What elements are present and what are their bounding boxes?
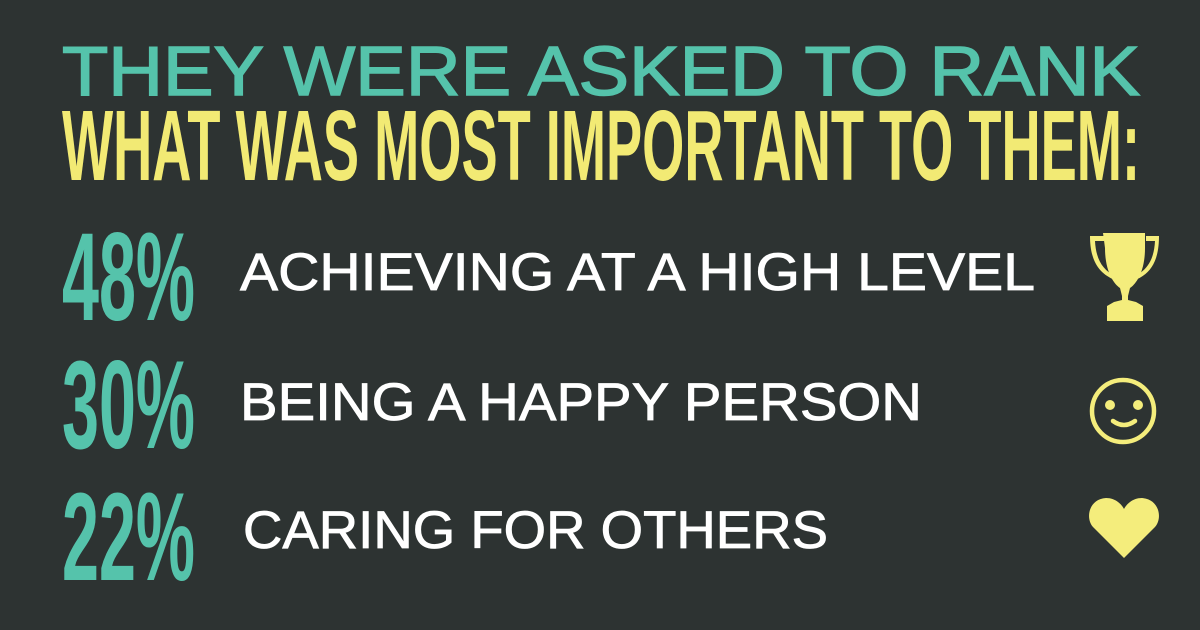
row 2: 30% happy: 30%: [62, 336, 195, 475]
row 3: 22% caring: 22%: [62, 468, 195, 607]
row 1: 48% achieving: [62, 208, 1035, 347]
icon: trophy: [1090, 233, 1159, 321]
icon: smiley: [1092, 380, 1154, 442]
row 3: 22% caring: CARING FOR OTHERS: [243, 501, 828, 560]
icon: heart: [1089, 498, 1159, 558]
title line 1: THEY WERE ASKED TO RANK: [62, 32, 1140, 110]
row 2: 30% happy: BEING A HAPPY PERSON: [240, 373, 922, 432]
row 3: 22% caring: [62, 468, 828, 607]
row 2: 30% happy: [62, 336, 922, 475]
row 1: 48% achieving: 48%: [62, 208, 195, 347]
row 1: 48% achieving: ACHIEVING AT A HIGH LEVEL: [240, 243, 1035, 302]
